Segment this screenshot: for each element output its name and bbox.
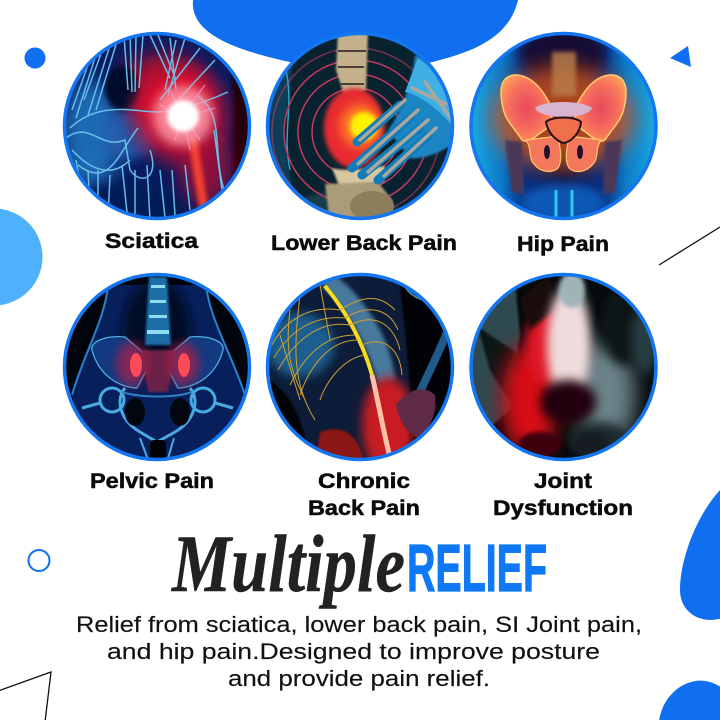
ring [64, 274, 250, 460]
heading script word: Multiple [170, 518, 405, 609]
body text: Relief from sciatica, lower back pain, SI Joint pain, [76, 612, 642, 637]
panel: hip pain [465, 27, 662, 256]
panel: pelvic pain [60, 270, 255, 493]
label: Chronic Back Pain: Back Pain [308, 497, 420, 520]
panel: chronic back pain [265, 270, 460, 520]
ring [471, 34, 656, 218]
ring [268, 274, 452, 460]
image: chronic back illustration [269, 276, 451, 458]
body text: and hip pain.Designed to improve posture [107, 639, 600, 664]
heading: Multiple Relief [170, 518, 547, 609]
panel: sciatica [60, 30, 257, 253]
background shape: top blue blob [193, 0, 518, 70]
label: Hip Pain: Hip Pain [517, 233, 609, 256]
image: lower back illustration [269, 35, 451, 217]
background shape: small blue dot [24, 48, 46, 68]
background shape: outlined black triangle [0, 672, 51, 720]
background shape: bottom right blue blob [659, 681, 720, 720]
panel: joint dysfunction [465, 270, 662, 520]
background shape: blue triangle [670, 46, 691, 67]
ring [471, 274, 656, 460]
image: pelvic illustration [66, 276, 248, 458]
label: Lower Back Pain: Lower Back Pain [271, 232, 457, 255]
image: hip illustration [472, 35, 654, 217]
body text: and provide pain relief. [228, 666, 490, 691]
image: sciatica illustration [66, 35, 248, 217]
label: Joint Dysfunction: Dysfunction [493, 497, 633, 520]
label: Chronic Back Pain: Chronic [318, 470, 410, 493]
background shape: right blue blob [680, 488, 720, 620]
image: joint dysfunction illustration [472, 276, 654, 458]
label: Pelvic Pain: Pelvic Pain [90, 470, 214, 493]
ring [64, 34, 250, 218]
panel: lower back pain [265, 30, 460, 255]
label: Sciatica: Sciatica [105, 230, 198, 253]
ring [268, 34, 452, 218]
label: Joint Dysfunction: Joint [534, 470, 592, 493]
heading blue word: RELIEF [407, 531, 547, 606]
background shape: outlined circle [28, 550, 50, 571]
hand [388, 55, 456, 158]
background shape: light blue circle [0, 208, 42, 306]
background shape: black line [659, 227, 720, 265]
